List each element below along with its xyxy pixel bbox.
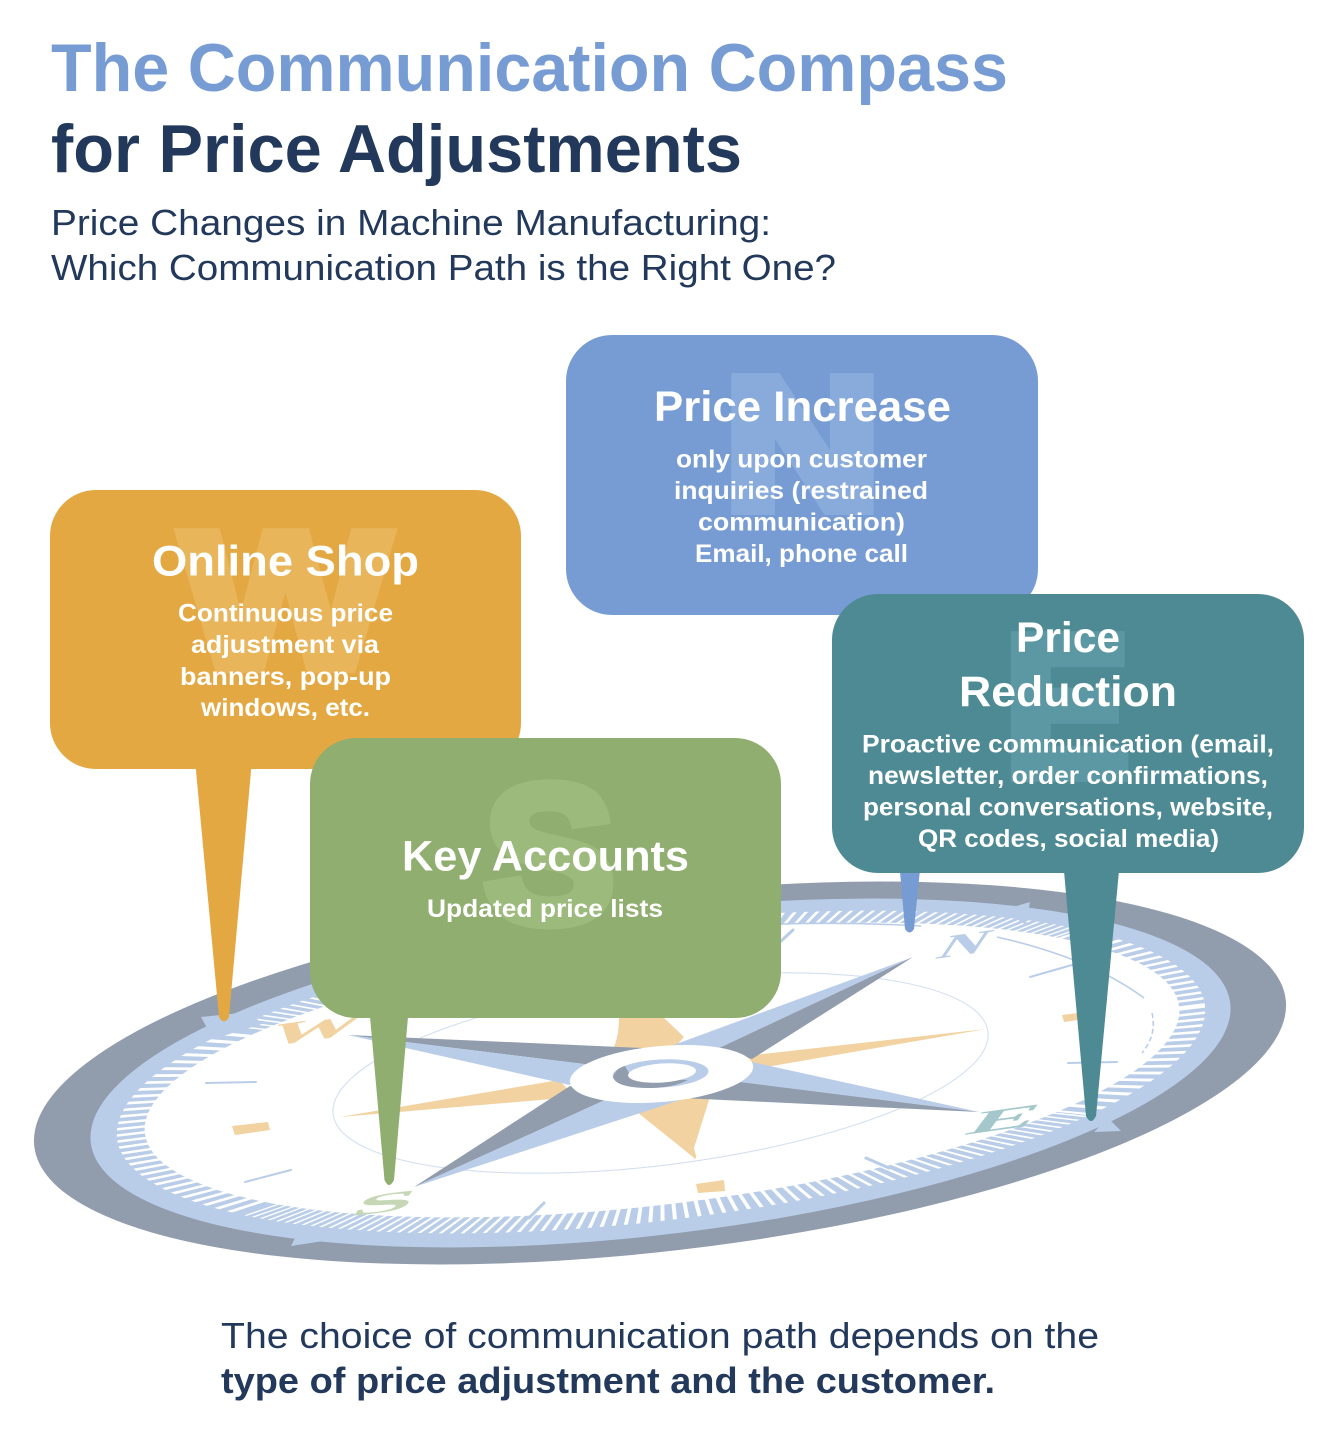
compass rose blue and gray points: [348, 957, 979, 1187]
compass blue bezel: [71, 843, 1250, 1303]
compass letter N: N: [929, 922, 1001, 967]
text: online shop: adjustment via: [191, 631, 380, 659]
compass white dial: [129, 874, 1195, 1266]
title: for Price Adjustments: [51, 111, 742, 187]
text: online shop: banners, pop-up: [180, 663, 391, 691]
title: [51, 30, 1008, 187]
text: online shop: Continuous price: [178, 600, 393, 628]
watermark N: N: [725, 341, 880, 548]
text: price increase: communication): [698, 508, 905, 536]
heading: online shop: Online Shop: [152, 538, 419, 586]
compass rose gold points: [340, 1017, 986, 1159]
heading: price reduction: Reduction: [959, 668, 1177, 716]
text: price increase: Email, phone call: [695, 540, 908, 568]
heading: price reduction: [959, 614, 1177, 716]
text: price reduction: QR codes, social media): [918, 825, 1219, 853]
conclusion text: [221, 1315, 1099, 1401]
panel: east, price reduction: [832, 594, 1304, 1121]
watermark S: S: [484, 746, 615, 964]
watermark W: W: [182, 492, 389, 708]
heading: key accounts: Key Accounts: [402, 832, 689, 880]
subtitle: Price Changes in Machine Manufacturing:: [51, 202, 771, 243]
title: The Communication Compass: [51, 30, 1008, 106]
compass tick marks: [116, 910, 1206, 1234]
compass letter S: S: [344, 1182, 427, 1224]
text: key accounts: Updated price lists: [427, 895, 663, 923]
rim wedges: [201, 902, 1121, 1246]
text: price increase: inquiries (restrained: [674, 477, 928, 505]
text: price reduction: Proactive communication (email,: [862, 730, 1274, 758]
subtitle: Which Communication Path is the Right One?: [51, 247, 836, 288]
inner ring: [322, 940, 999, 1206]
watermark E: E: [1005, 596, 1129, 818]
text: price increase: only upon customer: [676, 446, 927, 474]
compass illustration: [34, 882, 1286, 1264]
pointer: east: [1063, 860, 1120, 1121]
pointer: north: [899, 860, 921, 932]
compass letter E: E: [957, 1095, 1053, 1142]
text: online shop: [178, 600, 393, 722]
conclusion text: The choice of communication path depends on the: [221, 1315, 1099, 1356]
text: price reduction: personal conversations, website,: [863, 794, 1273, 822]
pointer: west: [195, 760, 252, 1022]
subtitle: [51, 202, 836, 288]
dial arcs: [782, 923, 1153, 1053]
pointer: south: [369, 1005, 409, 1185]
text: price reduction: [862, 730, 1274, 853]
compass outer rim: [14, 823, 1306, 1323]
compass minor directions: [232, 1013, 1078, 1193]
heading: price increase: Price Increase: [654, 383, 951, 431]
compass hub: [567, 1038, 756, 1110]
text: price increase: [674, 446, 928, 568]
panel: west, online shop: [50, 490, 521, 1022]
panel: south, key accounts: [310, 738, 781, 1185]
text: online shop: windows, etc.: [200, 694, 370, 722]
text: price reduction: newsletter, order confirmations,: [868, 762, 1268, 790]
panel: north, price increase: [566, 335, 1038, 932]
compass letter W: W: [257, 1004, 376, 1054]
dial minor ticks: [206, 930, 1117, 1218]
heading: price reduction: Price: [1016, 614, 1120, 662]
conclusion text: type of price adjustment and the customer.: [221, 1360, 995, 1401]
